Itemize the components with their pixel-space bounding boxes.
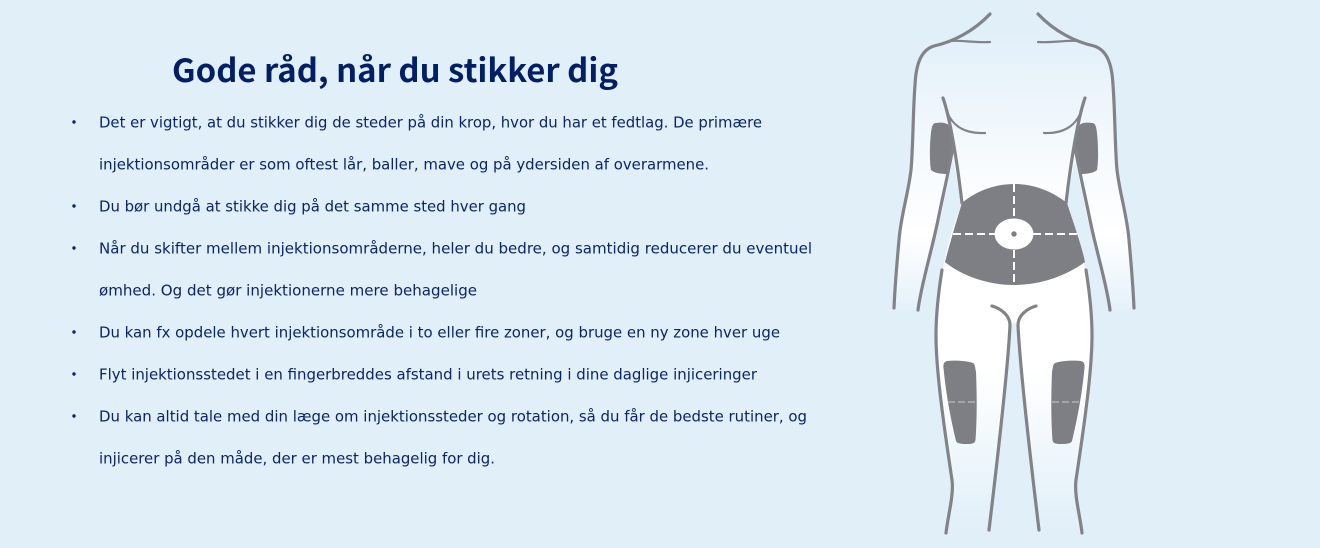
tip 6: injicerer på den måde, der er mest behagelig for dig.: [99, 450, 495, 468]
tip 1: Det er vigtigt, at du stikker dig de steder på din krop, hvor du har et fedtlag. De primære: [99, 114, 762, 132]
title: Gode råd, når du stikker dig: [172, 46, 618, 92]
tip 5: Flyt injektionsstedet i en fingerbreddes afstand i urets retning i dine daglige injiceringer: [99, 366, 758, 384]
injection zone: thighs: [943, 361, 1085, 444]
tip 3: ømhed. Og det gør injektionerne mere behagelige: [99, 282, 477, 300]
body fill: [894, 14, 1134, 533]
tip 6: [99, 408, 807, 468]
tip 3: Når du skifter mellem injektionsområderne, heler du bedre, og samtidig reducerer du eventuel: [99, 240, 812, 258]
tip 3: [99, 240, 812, 300]
bullets: [72, 120, 76, 418]
tip 2: Du bør undgå at stikke dig på det samme sted hver gang: [99, 198, 526, 216]
injection zone: abdomen: [945, 184, 1085, 285]
tip 6: Du kan altid tale med din læge om injektionssteder og rotation, så du får de bedste rutiner, og: [99, 408, 807, 426]
navel: [994, 218, 1034, 250]
outline: left side: [894, 14, 1010, 533]
outline: right side: [1018, 14, 1134, 533]
tip 1: injektionsområder er som oftest lår, baller, mave og på ydersiden af overarmene.: [99, 156, 709, 174]
tips list: [72, 114, 812, 468]
injection zone: upper arms: [930, 123, 1098, 174]
tip 1: [99, 114, 762, 174]
body diagram: [894, 14, 1134, 533]
tip 4: Du kan fx opdele hvert injektionsområde i to eller fire zoner, og bruge en ny zone hver uge: [99, 324, 780, 342]
